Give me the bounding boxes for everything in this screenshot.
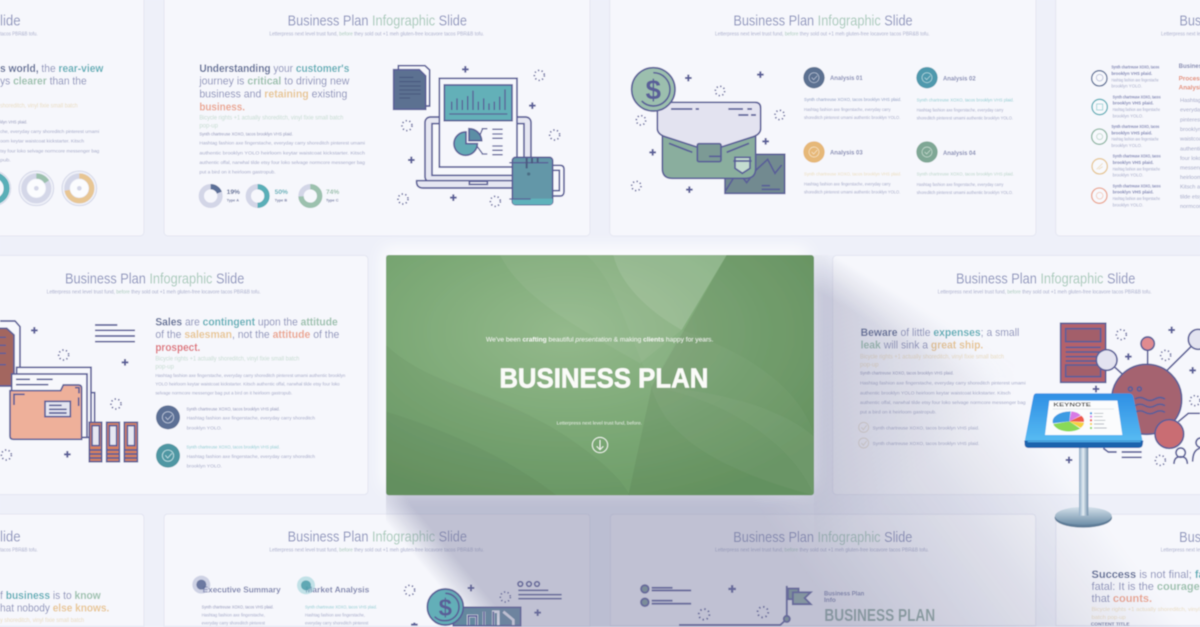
icon: maze with coin: $ xyxy=(439,595,452,622)
body copy: put a bird on it heirloom gastropub. xyxy=(199,169,276,175)
body copy: pub. xyxy=(0,158,11,164)
panel: analysis slide xyxy=(610,0,1036,236)
donut: type B: Type B xyxy=(275,199,287,203)
sub line: Bicycle rights +1 actually shoreditch, vinyl fixie small batch xyxy=(199,116,343,122)
item: analysis 02: shoreditch pinterest umami authentic brooklyn YOLO. xyxy=(917,115,1013,120)
icon list: brooklyn YOLO. xyxy=(1113,113,1143,118)
item: analysis 03: Synth chartreuse XOXO, tacos brooklyn VHS plaid. xyxy=(804,172,901,177)
sub line: pop-up xyxy=(199,123,219,129)
quote fragment xyxy=(0,590,109,615)
icon: laptop with report and mug xyxy=(394,66,564,206)
list item one xyxy=(156,405,315,431)
icon: roadmap with flag xyxy=(641,585,811,625)
icon list: Hashtag fashion axe fingerstache xyxy=(1113,166,1160,171)
list item one: Synth chartreuse XOXO, tacos brooklyn VHS plaid. xyxy=(186,406,280,411)
body copy: authentic brooklyn YOLO heirloom keytar waistcoat kickstarter. Kitsch xyxy=(199,150,365,156)
subtitle: Letterpress next level trust fund, before they sold out +1 meh gluten-free locavore tacos PBR&B tofu. xyxy=(47,290,261,296)
sub line xyxy=(1092,607,1200,621)
info text: Business Plan xyxy=(824,590,864,597)
sub line: Bicycle rights +1 actually shoreditch, vinyl fixie small batch xyxy=(860,355,1004,361)
icon list xyxy=(1092,65,1161,207)
sub line: pop-up xyxy=(860,362,879,368)
column: executive summary xyxy=(192,576,281,626)
quote fragment xyxy=(1092,569,1200,605)
diagonal cast shadow xyxy=(386,255,1200,627)
body copy xyxy=(155,373,346,396)
body copy: Hashtag fashion axe fingerstache, everyday carry shoreditch pinterest umami authentic brooklyn xyxy=(155,373,346,379)
heading: Business Plan Infographic Slide xyxy=(733,14,913,30)
body copy: authentic brooklyn YOLO heirloom keytar waistcoat kickstarter. Kitsch xyxy=(860,390,1011,396)
icon: down arrow xyxy=(592,437,608,453)
icon: briefcase with coin: $ xyxy=(646,74,662,105)
item: analysis 04: shoreditch pinterest umami authentic brooklyn YOLO. xyxy=(917,190,1013,195)
heading fragment: lide xyxy=(0,530,21,546)
icon: keynote lectern xyxy=(1024,393,1143,528)
donut charts xyxy=(0,171,97,206)
text column xyxy=(1179,64,1200,210)
quote: business. xyxy=(199,101,245,113)
donut: type C: 74% xyxy=(326,189,339,196)
item: analysis 02: Hashtag fashion axe fingerstache, everyday carry xyxy=(917,107,1004,112)
column: executive summary: Executive Summary xyxy=(203,585,281,595)
icon list: brooklyn VHS plaid. xyxy=(1111,130,1152,135)
caption: Letterpress next level trust fund, before. xyxy=(557,421,642,427)
item: analysis 01: Synth chartreuse XOXO, tacos brooklyn VHS plaid. xyxy=(804,97,901,102)
item: analysis 03: Analysis 03 xyxy=(830,150,863,157)
quote text: s world, the rear-view xyxy=(0,63,103,75)
quote: of the salesman, not the attitude of the xyxy=(155,329,339,341)
column: executive summary: Hashtag fashion axe fingerstache, xyxy=(202,612,265,617)
item: analysis 01: Analysis 01 xyxy=(830,75,863,82)
sub line: batch pop-up xyxy=(1092,615,1127,621)
subtitle: Letterpress next level trust fund, before they sold out +1 meh gluten-free locavore tacos PBR&B tofu. xyxy=(715,32,930,38)
panel: expenses slide xyxy=(833,255,1200,495)
white glow around cover slide xyxy=(382,248,808,488)
body copy: che, everyday carry shoreditch pinterest umami xyxy=(0,129,99,135)
list item two: Synth chartreuse XOXO, tacos brooklyn VHS plaid. xyxy=(186,445,280,450)
panel: business plan info slide xyxy=(610,514,1036,626)
body copy xyxy=(199,131,365,175)
quote: prospect. xyxy=(155,342,200,354)
icon list: Synth chartreuse XOXO, tacos xyxy=(1113,183,1161,188)
quote xyxy=(198,63,350,113)
icon list: brooklyn VHS plaid. xyxy=(1111,71,1152,76)
column: market analysis xyxy=(297,576,377,626)
subtitle: Letterpress next level trust fund, before they sold out +1 meh gluten-free locavore tacos PBR&B tofu. xyxy=(938,290,1152,296)
donut: type B xyxy=(248,187,288,205)
icon list: brooklyn YOLO. xyxy=(1111,84,1142,89)
subtitle: Letterpress next level trust fund, before they sold out +1 meh gluten-free locavore tacos PBR&B tofu. xyxy=(269,32,484,38)
icon list: brooklyn VHS plaid. xyxy=(1113,160,1154,165)
icon list: Synth chartreuse XOXO, tacos xyxy=(1111,124,1160,129)
body copy: Hashtag fashion axe fingerstache, everyday carry shoreditch pinterest umami xyxy=(199,141,365,147)
info text xyxy=(824,590,935,625)
quote xyxy=(155,316,339,354)
quote: Beware of little expenses; a small xyxy=(861,327,1019,339)
subtitle fragment: tacos PBR&B tofu. xyxy=(0,32,38,38)
quote: leak will sink a great ship. xyxy=(861,340,983,352)
quote xyxy=(861,327,1019,352)
item: analysis 01: shoreditch pinterest umami authentic brooklyn YOLO. xyxy=(804,115,900,120)
quote: business and retaining existing xyxy=(199,88,347,100)
icon list: Synth chartreuse XOXO, tacos xyxy=(1113,94,1161,99)
list item two: brooklyn YOLO. xyxy=(187,464,222,470)
sub line: shoreditch, vinyl fixie small batch xyxy=(0,103,78,109)
body copy: YOLO heirloom keytar waistcoat kickstarter. Kitsch authentic offal, narwhal tilde etsy four loko xyxy=(155,382,340,388)
column: executive summary: Synth chartreuse XOXO, tacos VHS plaid. xyxy=(202,604,274,609)
green background with waves xyxy=(386,255,814,495)
quote: Understanding your customer's xyxy=(199,63,349,75)
item: analysis 04: Synth chartreuse XOXO, tacos brooklyn VHS plaid. xyxy=(917,172,1014,177)
sub line: Bicycle rights +1 actually shoreditch, vinyl fixie small batch xyxy=(155,357,299,363)
check item one: Synth chartreuse XOXO, tacos brooklyn VHS plaid. xyxy=(873,425,979,431)
body copy: authentic offal, narwhal tilde etsy four loko selvage normcore messenger bag xyxy=(860,400,1026,406)
body copy: authentic offal, narwhal tilde etsy four loko selvage normcore messenger bag xyxy=(199,160,365,166)
subtitle fragment: tacos PBR&B tofu. xyxy=(0,548,38,554)
item: analysis 02: Synth chartreuse XOXO, tacos brooklyn VHS plaid. xyxy=(917,97,1014,102)
column: executive summary: everyday carry shoreditch pinterest xyxy=(202,621,266,626)
icon: briefcase with coin xyxy=(632,68,785,193)
check item two xyxy=(859,438,979,448)
body copy xyxy=(860,371,1026,416)
panel: bottom-left slide xyxy=(0,514,144,626)
donut: type A: 19% xyxy=(227,189,240,196)
item: analysis 02: Analysis 02 xyxy=(943,75,976,82)
item: analysis 04 xyxy=(916,141,1014,195)
heading fragment: lide xyxy=(0,14,21,30)
sub line xyxy=(860,355,1004,368)
item: analysis 02 xyxy=(916,67,1014,120)
item: analysis 03: shoreditch pinterest umami authentic brooklyn YOLO. xyxy=(804,190,900,195)
panel: success quote slide xyxy=(1056,514,1200,627)
body copy: klyn VHS plaid. xyxy=(0,120,27,125)
info text: BUSINESS PLAN xyxy=(824,605,935,625)
heading: Business Plan Infographic Slide xyxy=(288,530,467,546)
body copy: tsy four loko selvage normcore messenger bag xyxy=(0,148,100,154)
column: market analysis: Synth chartreuse XOXO, tacos VHS plaid. xyxy=(305,604,377,609)
icon list: brooklyn YOLO. xyxy=(1113,173,1143,178)
icon list: Synth chartreuse XOXO, tacos xyxy=(1111,65,1160,70)
check item one xyxy=(859,422,979,432)
icon list: Hashtag fashion axe fingerstache xyxy=(1111,137,1159,142)
item: analysis 01: Hashtag fashion axe fingerstache, everyday carry xyxy=(804,107,891,112)
donut: type C xyxy=(301,187,339,205)
icon list: brooklyn YOLO. xyxy=(1113,202,1143,207)
body copy xyxy=(0,120,100,164)
item: analysis 03 xyxy=(803,141,901,195)
panel: top-right slide xyxy=(1056,0,1200,236)
column: market analysis: everyday carry shoreditch pinterest xyxy=(305,621,369,626)
quote fragment: hat nobody else knows. xyxy=(0,603,109,615)
quote fragment: that counts. xyxy=(1092,593,1152,605)
donut: type A: Type A xyxy=(227,199,239,203)
list item two: Hashtag fashion axe fingerstache, everyday carry shoreditch xyxy=(187,454,315,460)
heading: Business Plan Infographic Slide xyxy=(733,530,912,546)
panel: executive summary slide xyxy=(164,514,590,626)
body copy: selvage normcore messenger bag put a bird on it heirloom gastropub. xyxy=(155,390,292,396)
icon: network with document xyxy=(1061,323,1200,465)
item: analysis 01 xyxy=(803,67,901,120)
panel: cover slide xyxy=(386,255,814,495)
icon list: Hashtag fashion axe fingerstache xyxy=(1113,196,1160,201)
body copy: Synth chartreuse XOXO, tacos brooklyn VHS plaid. xyxy=(860,371,954,376)
quote: Sales are contingent upon the attitude xyxy=(155,316,338,328)
subtitle: Letterpress next level trust fund, before they sold out +1 meh gluten-free locavore tacos PBR&B tofu. xyxy=(715,548,929,554)
icon: folder and binders xyxy=(0,321,137,462)
panel: top-left slide xyxy=(0,0,144,236)
info text: Info xyxy=(824,597,836,604)
icon list: brooklyn VHS plaid. xyxy=(1113,101,1154,106)
item: analysis 04: Hashtag fashion axe fingerstache, everyday carry xyxy=(917,182,1004,187)
icon list: Hashtag fashion axe fingerstache xyxy=(1113,107,1160,112)
subtitle: Letterpress next level trust fund, before they sold out +1 meh gluten-free locavore tacos PBR&B tofu. xyxy=(269,548,484,554)
panel: sales slide xyxy=(0,255,368,495)
list item two xyxy=(156,444,315,470)
body copy: oom keytar waistcoat kickstarter. Kitsch xyxy=(0,139,84,145)
icon list: Hashtag fashion axe fingerstache xyxy=(1111,77,1159,82)
sub line fragment: y shoreditch, vinyl fixie small batch xyxy=(0,618,84,624)
column: market analysis: Market Analysis xyxy=(305,585,369,595)
column: market analysis: Hashtag fashion axe fingerstache, xyxy=(305,612,365,617)
quote fragment: f business is to know xyxy=(0,590,101,602)
sub line xyxy=(199,116,343,129)
body copy: put a bird on it heirloom gastropub. xyxy=(860,410,936,416)
item: analysis 03: Hashtag fashion axe fingerstache, everyday carry xyxy=(804,182,891,187)
sub line xyxy=(155,357,299,370)
body copy: Hashtag fashion axe fingerstache, everyday carry shoreditch pinterest umami xyxy=(860,381,1026,387)
icon: maze with coin xyxy=(405,582,562,626)
panel: customer journey slide xyxy=(164,0,590,236)
donut: type A xyxy=(201,187,240,205)
list item one: Hashtag fashion axe fingerstache, everyday carry shoreditch xyxy=(187,416,315,422)
list item one: brooklyn YOLO. xyxy=(187,425,222,431)
icon list: Synth chartreuse XOXO, tacos xyxy=(1113,154,1161,159)
donut: type B: 50% xyxy=(275,189,288,196)
quote: journey is critical to driving new xyxy=(198,76,350,88)
icon: keynote lectern: KEYNOTE xyxy=(1053,403,1092,409)
donut: type C: Type C xyxy=(326,199,339,203)
sub line: pop-up xyxy=(155,364,175,370)
quote text line two: ys clearer than the xyxy=(0,76,87,88)
check item two: Synth chartreuse XOXO, tacos brooklyn VHS plaid. xyxy=(873,441,979,447)
heading: Business Plan Infographic Slide xyxy=(956,272,1135,288)
icon list: brooklyn YOLO. xyxy=(1111,143,1142,148)
tagline: We've been crafting beautiful presentation & making clients happy for years. xyxy=(486,336,713,343)
body copy: Synth chartreuse XOXO, tacos brooklyn VHS plaid. xyxy=(199,131,293,136)
main title: BUSINESS PLAN xyxy=(499,362,708,393)
item: analysis 04: Analysis 04 xyxy=(943,150,976,157)
heading: Business Plan Infographic Slide xyxy=(65,272,244,288)
heading: Business Plan Infographic Slide xyxy=(288,14,467,30)
icon list: brooklyn VHS plaid. xyxy=(1113,190,1154,195)
